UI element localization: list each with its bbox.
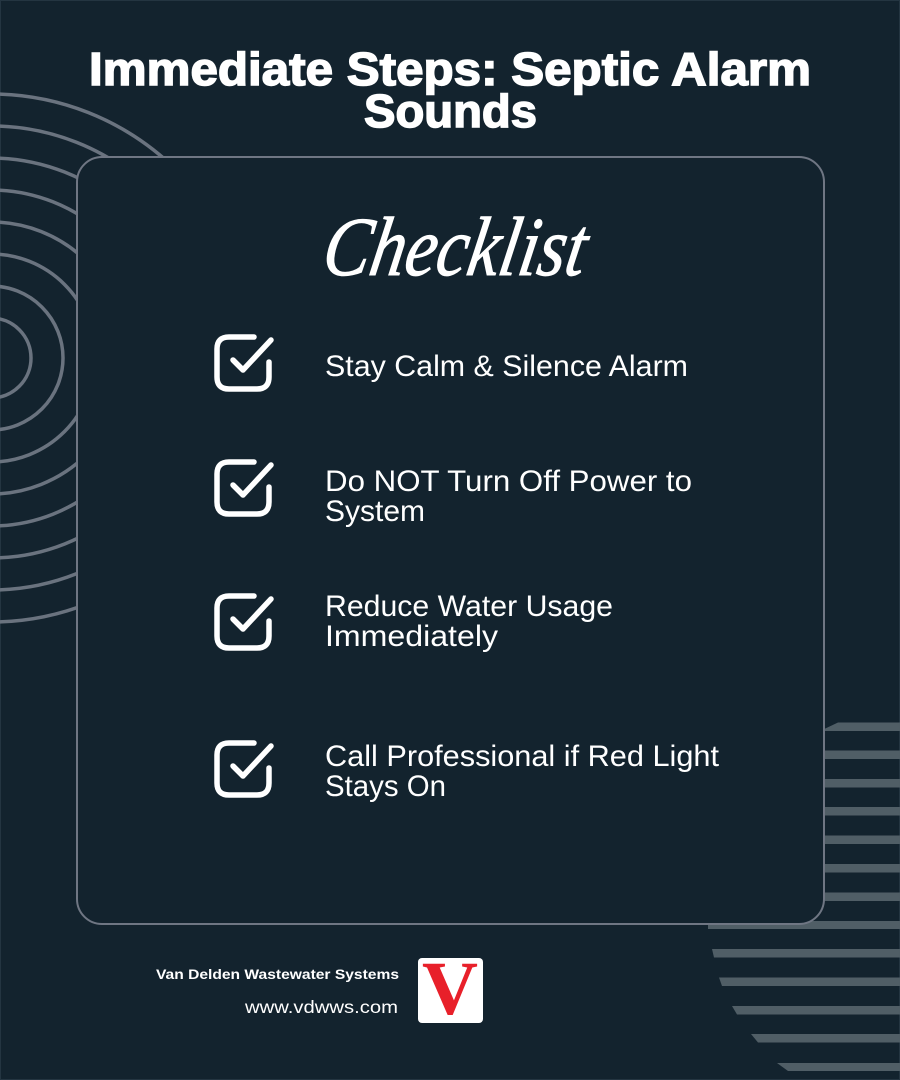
logo letter: V — [422, 947, 478, 1031]
item text: Do NOT Turn Off Power to — [325, 465, 692, 498]
item 2: do not turn off power — [217, 462, 692, 528]
title: Immediate Steps: Septic Alarm — [89, 43, 811, 95]
item 4: call professional — [217, 740, 720, 803]
title: Sounds — [364, 85, 537, 137]
item text — [325, 740, 720, 803]
title — [89, 43, 811, 137]
logo tile — [418, 958, 483, 1023]
company name: Van Delden Wastewater Systems — [156, 967, 399, 982]
logo — [418, 947, 483, 1031]
icon: checkbox 1 — [217, 337, 271, 389]
card background — [77, 157, 824, 924]
icon: checkbox 4 — [217, 743, 271, 795]
icon: checkbox 3 — [217, 596, 271, 648]
website: www.vdwws.com — [244, 997, 398, 1017]
item text: Stays On — [325, 770, 446, 803]
item text: Call Professional if Red Light — [325, 740, 720, 773]
striped circle decoration — [708, 722, 900, 1071]
item 3: reduce water usage — [217, 590, 613, 653]
item text: System — [325, 495, 425, 528]
icon: checkbox 2 — [217, 462, 271, 514]
item text: Reduce Water Usage — [325, 590, 613, 623]
checklist heading: Checklist — [317, 202, 597, 294]
concentric arcs decoration — [0, 94, 255, 622]
footer — [156, 947, 483, 1031]
item 1: stay calm — [217, 337, 688, 389]
item text — [325, 590, 613, 653]
panel: checklist card — [77, 157, 824, 924]
item text — [325, 465, 692, 528]
item text: Stay Calm & Silence Alarm — [325, 350, 688, 383]
item text: Immediately — [325, 620, 498, 653]
